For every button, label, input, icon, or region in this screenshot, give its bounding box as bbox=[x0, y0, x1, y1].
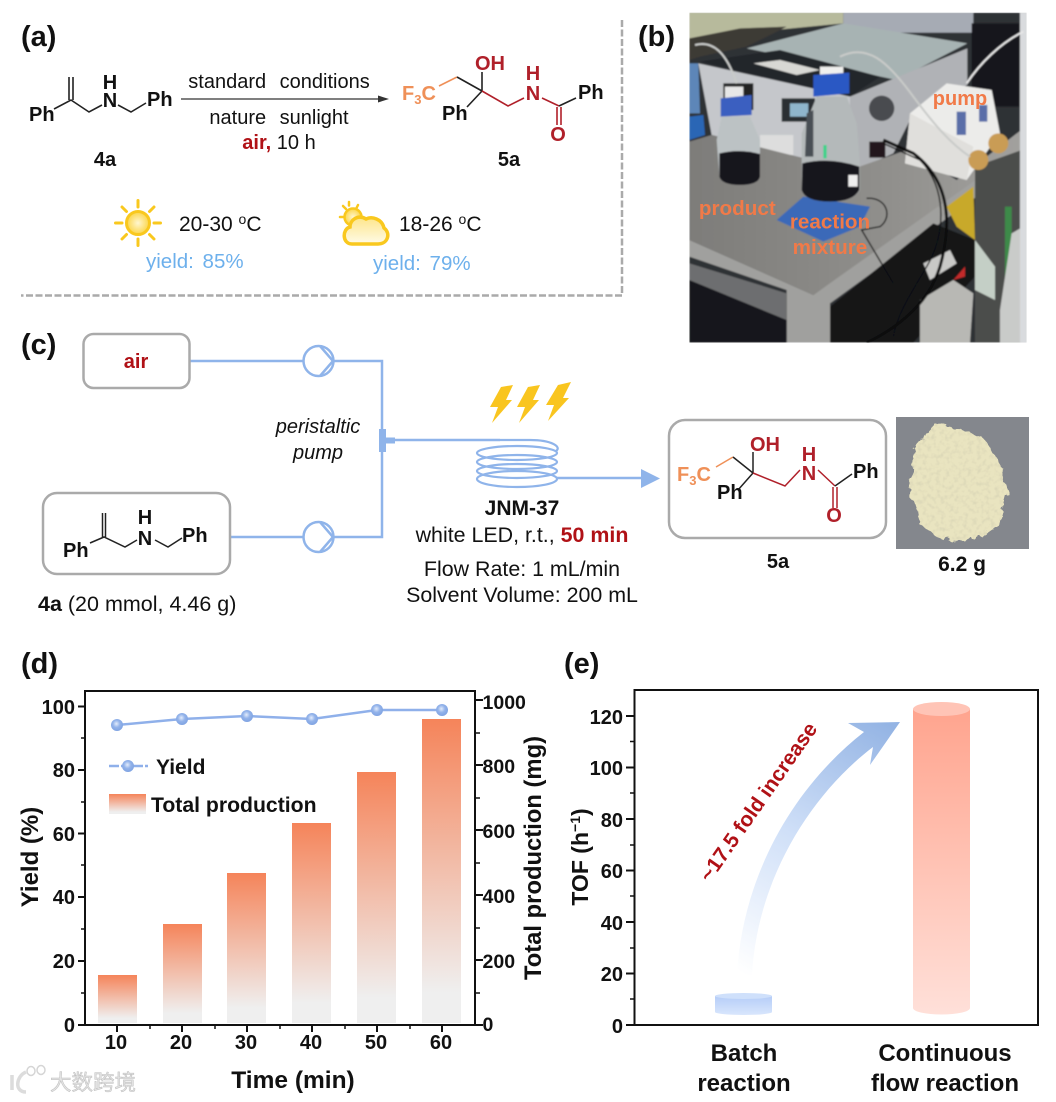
box: air bbox=[84, 334, 190, 388]
y axis tick labels: 100 bbox=[590, 758, 623, 780]
icon: upper peristaltic pump bbox=[304, 346, 334, 376]
label: 5a: 5a bbox=[767, 551, 790, 573]
photo label: reaction mixture bbox=[791, 214, 869, 254]
box: product 5a: OH bbox=[750, 434, 780, 456]
category label: batch: reaction bbox=[697, 1070, 791, 1097]
x axis tick labels: 40 bbox=[300, 1032, 322, 1054]
reaction conditions: nature sunlight bbox=[209, 107, 349, 129]
text: reactor conditions: white LED, r.t., 50 min bbox=[415, 523, 628, 547]
left axis tick labels: 40 bbox=[53, 887, 75, 909]
text: peristaltic pump: peristaltic bbox=[275, 416, 360, 438]
icon: coil reactor bbox=[477, 440, 558, 487]
text: reactor conditions: JNM-37 bbox=[485, 497, 559, 520]
legend: yield: Yield bbox=[156, 756, 205, 779]
panel border: dashed frame bbox=[21, 20, 622, 296]
box: substrate 4a: Ph bbox=[182, 525, 208, 547]
box: product 5a: Ph bbox=[853, 461, 879, 483]
text: reactor conditions: Flow Rate: 1 mL/min bbox=[424, 557, 620, 581]
right axis tick labels bbox=[482, 692, 526, 1036]
reaction conditions: standard conditions bbox=[188, 71, 370, 93]
photo label: pump: pump bbox=[933, 88, 987, 110]
box: product 5a: H bbox=[802, 444, 816, 466]
molecule: 5a: OH bbox=[475, 53, 505, 75]
label: 5a: 5a bbox=[498, 149, 521, 171]
label: 6.2 g: 6.2 g bbox=[938, 553, 986, 576]
heading: (c): (c) bbox=[21, 329, 56, 361]
icon: sun behind cloud bbox=[340, 202, 388, 244]
molecule: 5a bbox=[402, 53, 604, 146]
photo: reactor, bottles and pump bbox=[689, 13, 1027, 343]
category label: continuous flow: flow reaction bbox=[871, 1070, 1019, 1097]
reaction conditions bbox=[188, 71, 370, 154]
molecule: 4a: Ph bbox=[147, 89, 173, 111]
photo label: reaction mixture: mixture bbox=[793, 236, 867, 259]
right axis tick labels: 1000 bbox=[482, 692, 526, 714]
text: peristaltic pump: pump bbox=[292, 442, 343, 464]
left axis tick labels: 0 bbox=[64, 1015, 75, 1037]
icon: lightning bolts bbox=[490, 382, 571, 423]
bars: total production bbox=[98, 719, 461, 1023]
category label: batch bbox=[697, 1040, 791, 1097]
panel: (c) continuous flow scheme bbox=[21, 329, 1029, 616]
box: product 5a: O bbox=[826, 505, 842, 527]
box: substrate 4a: N bbox=[138, 528, 152, 550]
legend: total production: Total production bbox=[151, 794, 317, 817]
x axis tick labels: 30 bbox=[235, 1032, 257, 1054]
right axis tick labels: 0 bbox=[482, 1014, 494, 1036]
text: cloudy yield: yield: 79% bbox=[373, 252, 471, 275]
arrow: coil to product bbox=[557, 469, 660, 488]
left axis tick labels: 20 bbox=[53, 951, 75, 973]
label: 4a amount: 4a (20 mmol, 4.46 g) bbox=[38, 592, 236, 616]
panel: (a) batch sunlight reaction bbox=[21, 20, 622, 296]
photo label: product: product bbox=[699, 197, 776, 220]
y axis tick labels: 80 bbox=[601, 810, 623, 832]
right axis tick labels: 600 bbox=[482, 821, 515, 843]
y axis tick labels: 60 bbox=[601, 861, 623, 883]
y axis tick labels: 40 bbox=[601, 913, 623, 935]
axis title: TOF: TOF (h bbox=[567, 832, 593, 906]
x axis tick labels bbox=[105, 1032, 452, 1054]
heading: (b): (b) bbox=[638, 21, 675, 53]
x axis tick labels: 60 bbox=[430, 1032, 452, 1054]
molecule: 5a: N bbox=[526, 83, 540, 105]
x axis tick labels: 10 bbox=[105, 1032, 127, 1054]
left axis tick labels: 80 bbox=[53, 760, 75, 782]
text: sunny yield: yield: 85% bbox=[146, 250, 244, 273]
left axis tick labels: 100 bbox=[42, 697, 75, 719]
heading: (d): (d) bbox=[21, 648, 58, 680]
right axis tick labels: 400 bbox=[482, 886, 515, 908]
box: product 5a: F bbox=[677, 464, 689, 486]
text: reactor conditions bbox=[406, 497, 638, 607]
text: cloudy temperature: C bbox=[466, 213, 482, 236]
molecule: 5a: O bbox=[550, 124, 566, 146]
panel: (e) TOF comparison chart bbox=[564, 648, 1038, 1097]
molecule: 5a: C bbox=[421, 83, 436, 105]
right axis tick labels: 800 bbox=[482, 756, 515, 778]
left axis tick labels bbox=[42, 697, 75, 1037]
molecule: 4a: N bbox=[103, 90, 117, 112]
text: fold increase: ~17.5 fold increase bbox=[695, 718, 822, 886]
icon: sun bbox=[116, 200, 160, 246]
x axis tick labels: 20 bbox=[170, 1032, 192, 1054]
reaction arrow bbox=[181, 96, 389, 102]
axis title: time: Time (min) bbox=[231, 1067, 355, 1094]
box: air: air bbox=[124, 351, 148, 373]
reaction conditions: air, 10 h bbox=[242, 132, 316, 154]
molecule: 4a: Ph bbox=[29, 104, 55, 126]
molecule: 4a: H bbox=[103, 72, 117, 94]
heading: (e): (e) bbox=[564, 648, 599, 680]
text: sunny temperature: 20-30 bbox=[179, 213, 233, 236]
text: peristaltic pump bbox=[275, 416, 360, 464]
y axis tick labels: 0 bbox=[612, 1016, 623, 1038]
photo label: reaction mixture: reaction bbox=[790, 210, 870, 233]
chart frame and ticks bbox=[626, 690, 1038, 1025]
category label: continuous flow bbox=[871, 1040, 1019, 1097]
axis title: total production: Total production (mg) bbox=[520, 736, 547, 980]
chart frame and ticks bbox=[78, 691, 483, 1032]
T-mixer bbox=[379, 429, 395, 452]
box: substrate 4a: H bbox=[138, 507, 152, 529]
molecule: 5a: Ph bbox=[578, 82, 604, 104]
axis title: yield: Yield (%) bbox=[17, 807, 44, 907]
molecule: 5a: H bbox=[526, 63, 540, 85]
box: substrate 4a: Ph bbox=[63, 540, 89, 562]
panel: (d) yield and production chart bbox=[12, 648, 547, 1095]
category label: continuous flow: Continuous bbox=[878, 1040, 1012, 1067]
x axis tick labels: 50 bbox=[365, 1032, 387, 1054]
text: reactor conditions: Solvent Volume: 200 mL bbox=[406, 583, 638, 607]
text: sunny temperature: C bbox=[246, 213, 262, 236]
box: product 5a: 3 bbox=[689, 473, 696, 488]
left axis tick labels: 60 bbox=[53, 824, 75, 846]
y axis tick labels bbox=[590, 707, 623, 1038]
line: yield bbox=[111, 704, 448, 731]
watermark bbox=[12, 1066, 136, 1095]
label: 4a: 4a bbox=[94, 149, 117, 171]
icon: lower peristaltic pump bbox=[304, 522, 334, 552]
right axis tick labels: 200 bbox=[482, 951, 515, 973]
cylinder: continuous flow bbox=[913, 702, 970, 1015]
box: product 5a: C bbox=[696, 464, 711, 486]
box: product 5a: Ph bbox=[717, 482, 743, 504]
box: product 5a bbox=[669, 420, 886, 538]
panel: (b) photograph of flow setup bbox=[638, 13, 1027, 343]
legend: yield bbox=[109, 756, 205, 779]
text: cloudy temperature: o bbox=[459, 211, 467, 227]
category label: batch: Batch bbox=[711, 1040, 777, 1067]
curved arrow bbox=[737, 722, 900, 975]
axis title: TOF: ) bbox=[567, 808, 593, 816]
heading: (a): (a) bbox=[21, 21, 56, 53]
photo: product powder bbox=[896, 417, 1029, 549]
molecule: 5a: F bbox=[402, 83, 414, 105]
flow tubing bbox=[190, 361, 500, 537]
molecule: 4a bbox=[29, 72, 173, 126]
molecule: 5a: 3 bbox=[414, 92, 421, 107]
box: substrate 4a bbox=[43, 493, 230, 574]
y axis tick labels: 120 bbox=[590, 707, 623, 729]
axis title: TOF: −1 bbox=[567, 816, 583, 832]
molecule: 5a: Ph bbox=[442, 103, 468, 125]
text: cloudy temperature: 18-26 bbox=[399, 213, 453, 236]
watermark: 大数跨境 bbox=[50, 1071, 136, 1095]
text: sunny temperature: o bbox=[239, 211, 247, 227]
y axis tick labels: 20 bbox=[601, 964, 623, 986]
box: product 5a: N bbox=[802, 463, 816, 485]
cylinder: batch bbox=[715, 993, 772, 1015]
